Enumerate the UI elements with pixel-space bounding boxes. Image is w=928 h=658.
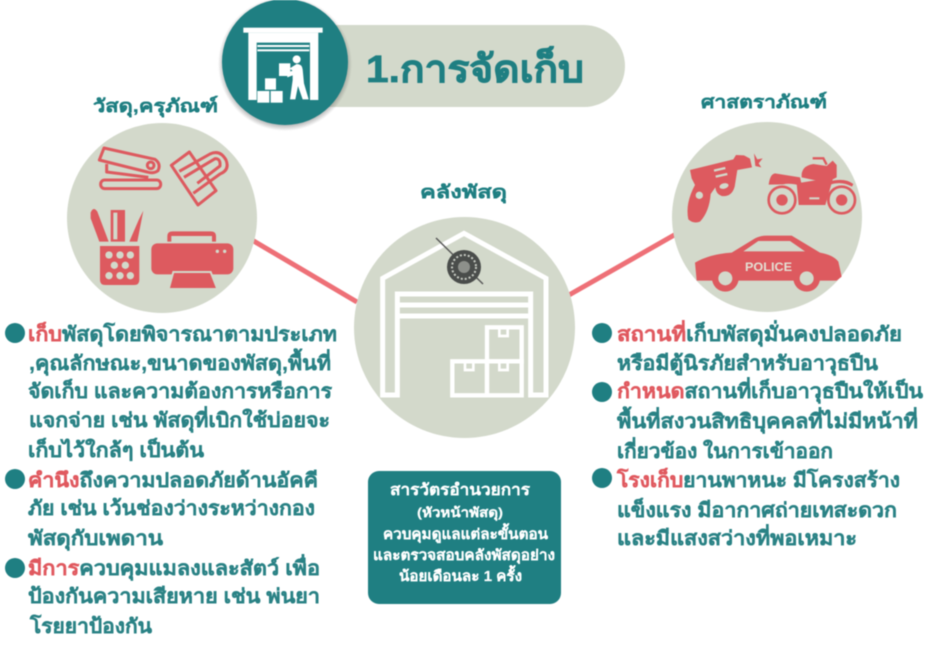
bullet 1: เก็บไว้ใกล้ๆ เป็นต้น: [28, 437, 204, 462]
bullet 2: [5, 469, 318, 551]
connector: left circle to warehouse: [252, 240, 357, 302]
bullet 2: ภัย เช่น เว้นช่องว่างระหว่างกอง: [28, 497, 315, 520]
bullet 3: โรยยาป้องกัน: [29, 614, 152, 638]
icon: motorcycle: [769, 158, 855, 213]
bullet 1: จัดเก็บ และความต้องการหรือการ: [28, 378, 332, 403]
bullet 1: [5, 321, 337, 462]
icons: revolver, motorcycle, police car: [687, 153, 855, 292]
bullet 2: กำหนดสถานที่เก็บอาวุธปืนให้เป็น: [617, 376, 923, 404]
bullet 2: พัสดุกับเพดาน: [28, 528, 163, 551]
icon: revolver: [687, 153, 763, 222]
text block: weapons storage guidelines: [592, 319, 923, 550]
text block: supplies storage guidelines: [5, 321, 337, 638]
callout: inspector responsibility: สารวัตรอำนวยการ: [390, 481, 530, 499]
circle: office supplies background: [67, 123, 257, 313]
bullet 1: หรือมีตู้นิรภัยสำหรับอาวุธปืน: [617, 352, 878, 377]
title: 1.การจัดเก็บ: [366, 46, 584, 91]
panel: central warehouse: [354, 182, 575, 438]
bullet 1: แจกจ่าย เช่น พัสดุที่เบิกใช้บ่อยจะ: [29, 405, 330, 433]
callout: inspector responsibility: (หัวหน้าพัสดุ): [417, 505, 503, 521]
icons: stapler, clip, pens, printer: [91, 148, 233, 289]
bullet 3: มีการควบคุมแมลงและสัตว์ เพื่อ: [28, 553, 320, 581]
bullet 3: และมีแสงสว่างที่พอเหมาะ: [617, 523, 857, 550]
bullet 2: คำนึงถึงความปลอดภัยด้านอัคคี: [28, 469, 318, 492]
icon: warehouse worker: [218, 0, 352, 131]
bullet 1: เก็บพัสดุโดยพิจารณาตามประเภท: [28, 321, 337, 347]
bullet 1: สถานที่ เก็บพัสดุมั่นคงปลอดภัย: [617, 319, 902, 347]
panel: office supplies: [67, 95, 257, 313]
police label: POLICE: [745, 260, 792, 274]
callout: inspector responsibility: และตรวจสอบคลังพัสดุอย่าง: [373, 548, 555, 564]
icon: police car: [695, 236, 842, 292]
panel: weapons and vehicles: [672, 91, 862, 312]
bullet 3: ป้องกันความเสียหาย เช่น พ่นยา: [28, 585, 320, 608]
heading: warehouse: คลังพัสดุ: [420, 182, 507, 204]
heading: weapons and vehicles: ศาสตราภัณฑ์: [701, 91, 827, 112]
bullet 3: [592, 467, 900, 550]
bullet 1: [592, 319, 902, 377]
icon: printer: [151, 231, 233, 289]
icon: binder clip: [171, 152, 227, 205]
bullet 3: โรงเก็บยานพาหนะ มีโครงสร้าง: [616, 467, 900, 492]
callout: inspector responsibility: น้อยเดือนละ 1 ครั้ง: [399, 565, 522, 585]
bullet 1: ,คุณลักษณะ,ขนาดของพัสดุ,พื้นที่: [29, 348, 331, 376]
connector: right circle to warehouse: [569, 234, 676, 295]
circle: warehouse background: [354, 217, 575, 438]
header pill: [285, 25, 625, 107]
heading: office supplies: วัสดุ,ครุภัณฑ์: [93, 95, 218, 118]
icon: stapler: [99, 148, 161, 189]
icon: pen cup: [91, 209, 143, 285]
callout: inspector responsibility: ควบคุมดูแลแต่ละขั้นตอน: [383, 523, 548, 543]
callout: inspector responsibility: [368, 471, 561, 604]
circle: weapons background: [672, 122, 862, 312]
icon: warehouse outline: [383, 233, 546, 395]
bullet 3: [5, 553, 320, 638]
bullet 3: แข็งแรง มีอากาศถ่ายเทสะดวก: [617, 497, 897, 522]
bullet 2: เกี่ยวข้อง ในการเข้าออก: [617, 436, 833, 463]
bullet 2: พื้นที่สงวนสิทธิบุคคลที่ไม่มีหน้าที่: [617, 406, 918, 434]
header banner: [218, 0, 625, 131]
bullet 2: [592, 376, 923, 463]
icon: seal emblem: [436, 238, 483, 284]
